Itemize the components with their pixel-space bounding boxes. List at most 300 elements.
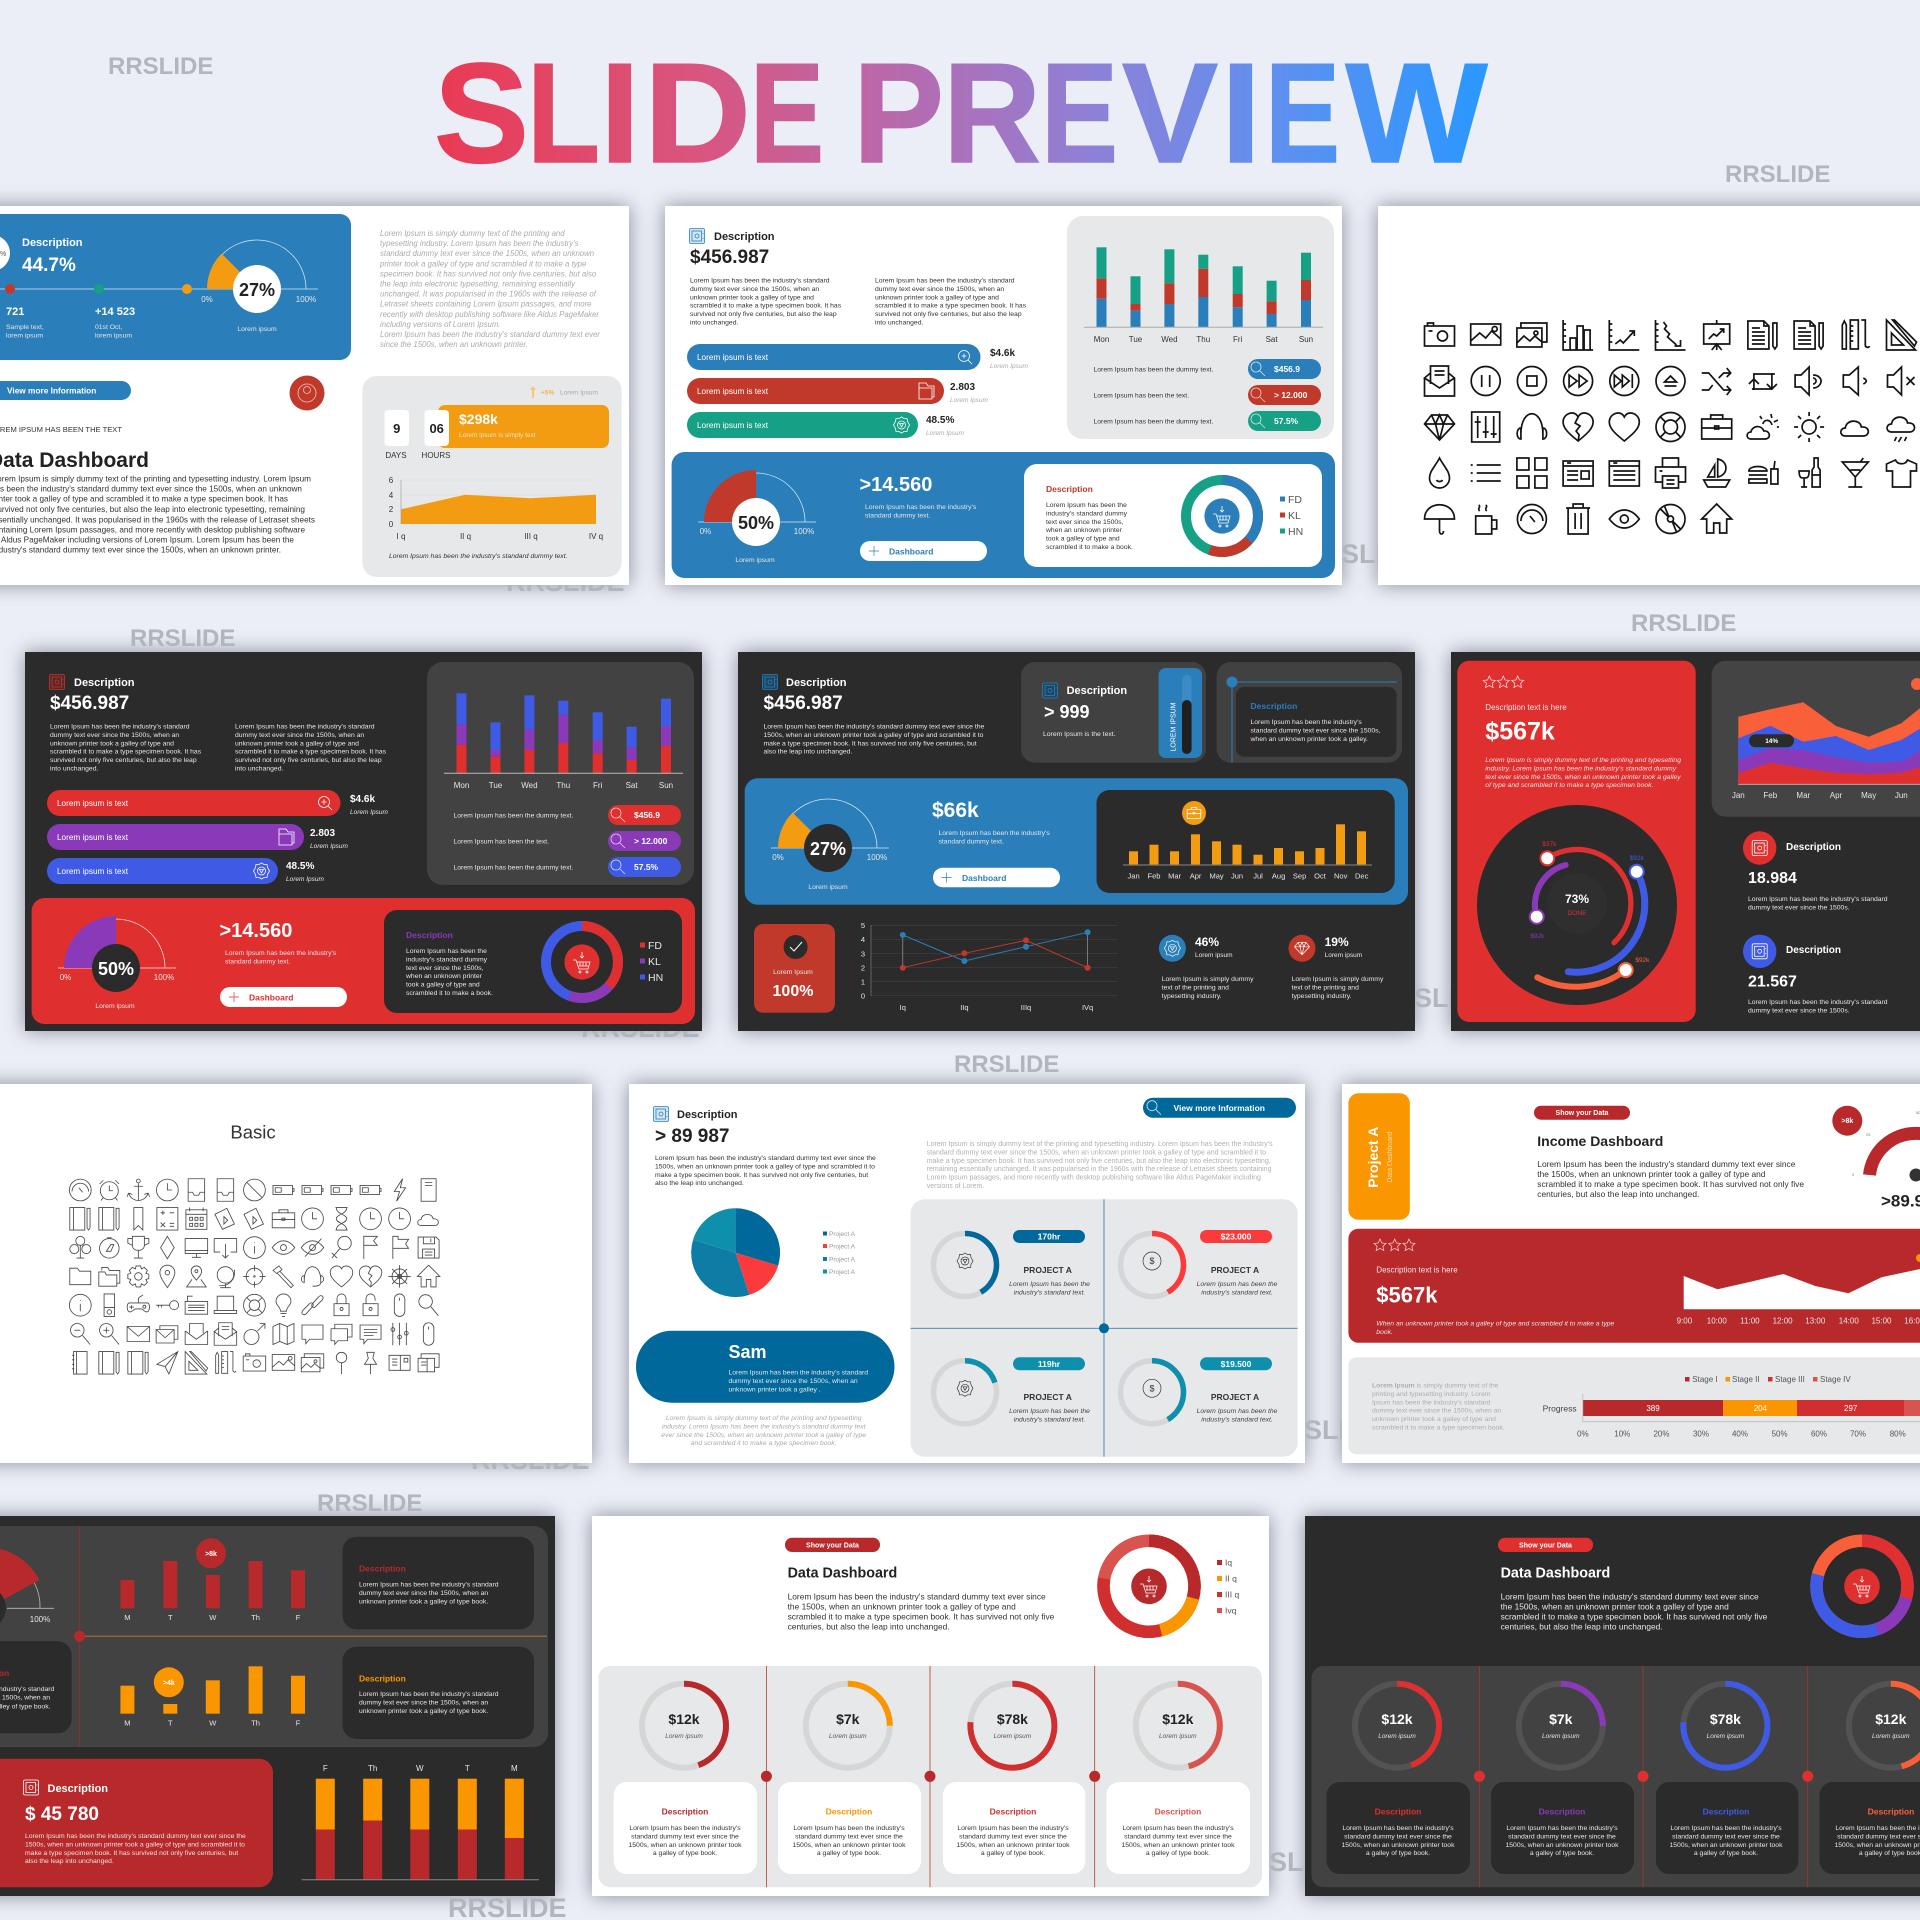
panel: blue gauge: [0, 214, 351, 360]
icon: cards heart: [244, 1208, 263, 1229]
progress bar blue: [687, 344, 1029, 370]
icon: user in red circle: [290, 376, 324, 410]
panel: blue footer: [672, 452, 1335, 578]
paragraph: 1500s, when an unknown printer took a galley of type and scrambled it to: [764, 732, 984, 739]
text column 2: into unchanged.: [235, 766, 283, 772]
dark monthly bar chart: Mar: [1168, 872, 1182, 880]
icon: cart: [1131, 1568, 1167, 1604]
progress bar green: [687, 412, 965, 438]
project tab: Project A: [1365, 1127, 1381, 1188]
panel: red radial: [1457, 661, 1696, 1022]
metric $7k: Lorem Ipsum has been the industry's: [1506, 1825, 1618, 1832]
days counter: DAYS: [385, 451, 407, 460]
progress bar purple: Lorem ipsum is text: [57, 833, 129, 842]
pie legend: [823, 1231, 856, 1276]
icon: house: [417, 1265, 440, 1287]
icon: diamond suit: [161, 1236, 174, 1259]
italic grey paragraph: Lorem Ipsum has been the industry's standard dummy text ever: [380, 330, 600, 339]
icon: house: [1702, 504, 1732, 533]
card: cropped description: [0, 1641, 72, 1733]
icon: bar chart: [1563, 320, 1593, 350]
pie legend: Project A: [829, 1269, 856, 1276]
stat 46%: 46%: [1195, 935, 1219, 949]
paragraph: Lorem Ipsum has been the industry's standard dummy text ever since the: [655, 1155, 876, 1162]
red weekly bars: T: [168, 1613, 173, 1622]
legend: FD: [648, 940, 662, 952]
text column 2: unknown printer took a galley of type and: [875, 294, 999, 301]
line chart: 3: [861, 950, 865, 958]
paragraph: the 1500s, when an unknown printer took a galley of type and: [1537, 1169, 1766, 1179]
red weekly bars: Th: [251, 1613, 260, 1622]
title: E: [1041, 34, 1118, 193]
icon: briefcase: [272, 1210, 295, 1228]
stacked bar chart: Sat: [626, 781, 638, 790]
gauge 27%: 0%: [201, 295, 213, 304]
completion card: 100%: [773, 983, 813, 1000]
legend: [1217, 1558, 1239, 1616]
gauge 27%: [201, 240, 316, 333]
gauge 50%: 100%: [794, 527, 814, 536]
line chart: IIIq: [1021, 1003, 1031, 1012]
caption: Description text is here: [1376, 1266, 1458, 1275]
gauge cropped: [0, 1549, 54, 1630]
icon: speaker: [1843, 367, 1866, 395]
slide 10: dark weekly dashboard, cropped left: [0, 1516, 555, 1896]
red weekly bars: M: [124, 1613, 131, 1622]
metric $12k: [1327, 1684, 1470, 1874]
paragraph: centuries, but also the leap into unchanged.: [1537, 1189, 1699, 1199]
row: blue pill: $456.9: [1274, 364, 1300, 374]
italic grey paragraph: the leap into electronic typesetting, remaining essentially: [380, 280, 576, 288]
icon: postcard: [389, 1355, 410, 1370]
icon: presentation: [1704, 320, 1730, 350]
stacked bar chart: Tue: [489, 781, 503, 790]
metric $78k: Lorem Ipsum has been the industry's: [957, 1825, 1069, 1832]
grey paragraph: remaining essentially unchanged. It was popularised in the 1960s with the release of Letraset sheets containing: [927, 1166, 1272, 1173]
gauge 27%: 0%: [772, 853, 784, 862]
watermark row three: RRSLIDE: [954, 1051, 1059, 1078]
semicircle gauge: 25: [1866, 1132, 1871, 1137]
icon: clock back: [156, 1179, 178, 1201]
panel: stacked area chart: Mar: [1796, 791, 1811, 800]
project $23.000: PROJECT A: [1211, 1265, 1259, 1275]
icon: loud speaker: [1795, 367, 1821, 395]
metric $12k: a galley of type book.: [1366, 1850, 1430, 1857]
stat 46%: [1159, 935, 1254, 1000]
stat 21.567: 21.567: [1748, 974, 1797, 991]
icon: eye off: [301, 1239, 324, 1257]
progress stacked bar: 40%: [1732, 1429, 1748, 1438]
row: red pill: > 12.000: [1274, 390, 1308, 400]
value: $567k: [1376, 1282, 1438, 1307]
metric $7k: a galley of type book.: [817, 1850, 881, 1857]
value: > 89 987: [655, 1126, 730, 1147]
chart note: Lorem Ipsum has been the industry's standard dummy text.: [389, 553, 568, 560]
stat 18.984: 18.984: [1748, 870, 1797, 887]
panel: red value: Lorem Ipsum has been the industry's standard dummy text ever since the: [25, 1833, 246, 1840]
icon: gauge: [1517, 504, 1546, 534]
white area chart: 13:00: [1805, 1317, 1826, 1326]
row: green pill: 57.5%: [1274, 416, 1299, 426]
progress stacked bar: [1543, 1394, 1920, 1438]
orange weekly bars: W: [209, 1719, 217, 1728]
gauge cropped: 100%: [30, 1615, 50, 1624]
stage legend: Stage II: [1732, 1375, 1760, 1384]
italic paragraph: Lorem Ipsum is simply dummy text of the printing and typesetting: [1485, 757, 1681, 764]
panel: red value: 1500s, when an unknown printer took a galley of type and scrambled it to: [25, 1841, 245, 1848]
dark description card: industry's standard dummy: [406, 956, 488, 963]
donut chart: [1816, 1541, 1908, 1632]
completion card: Lorem Ipsum: [773, 969, 813, 976]
icon: bulb: [276, 1294, 291, 1316]
dark monthly bar chart: Dec: [1355, 872, 1369, 880]
metric $78k: Lorem ipsum: [1707, 1733, 1745, 1740]
radial progress chart: $37k: [1542, 841, 1557, 848]
dashboard button: [860, 541, 987, 561]
vertical gauge: [1159, 668, 1202, 758]
text column 2: survived not only five centuries, but also the leap: [875, 311, 1022, 318]
legend: FD: [1288, 494, 1302, 506]
badge >8k: [1832, 1106, 1862, 1136]
progress bar red: Lorem ipsum is text: [697, 387, 769, 396]
icon: ban: [244, 1179, 265, 1201]
panel: red band: [1348, 1229, 1920, 1343]
panel: grey weekly: [0, 1526, 548, 1747]
watermark between slides 11 and 12: RRSLIDE: [1230, 1847, 1349, 1877]
row: red pill: Lorem Ipsum has been the dummy text.: [454, 812, 573, 820]
panel: blue callout: when an unknown printer took a galley.: [1250, 736, 1368, 743]
text column 1: Lorem Ipsum has been the industry's standard: [50, 724, 190, 730]
stat 18.984: Description: [1786, 842, 1841, 853]
icon: grid: [1517, 458, 1547, 488]
icon: set square: [185, 1352, 208, 1374]
text column 1: scrambled it to make a type specimen book. It has: [690, 303, 842, 310]
icon: cloud: [1841, 421, 1868, 436]
sub text: Lorem Ipsum has been the industry's: [938, 830, 1050, 837]
title: D: [644, 34, 751, 193]
dark description card: Description: [406, 930, 453, 940]
icon: unlock: [363, 1294, 378, 1316]
icon grid: [1424, 320, 1916, 534]
stars: [1374, 1239, 1415, 1251]
icon: headset: [301, 1267, 324, 1286]
stat 14 523: +14 523: [95, 306, 135, 318]
watermark between slides 8 and 9: RRSLIDE: [1265, 1415, 1384, 1445]
stacked weekly chart: Th: [368, 1764, 377, 1773]
text column 1: Lorem Ipsum has been the industry's standard: [690, 278, 830, 284]
title: L: [527, 34, 600, 193]
icon: lifebuoy: [244, 1294, 265, 1316]
icon: mouse: [394, 1294, 405, 1316]
project $23.000: [1120, 1230, 1278, 1297]
icon: chats: [331, 1324, 352, 1344]
icon: t-shirt: [1886, 460, 1916, 487]
stat 14 523: lorem ipsum: [95, 332, 132, 339]
icon: compass: [100, 1238, 119, 1258]
stacked weekly chart: M: [511, 1764, 518, 1773]
card: orange description: [342, 1647, 534, 1739]
show your data pill: [1534, 1106, 1630, 1120]
project 119hr: industry's standard text.: [1014, 1417, 1085, 1424]
metric $7k: [778, 1684, 921, 1874]
project 119hr: Lorem Ipsum has been the: [1009, 1408, 1090, 1415]
icon: paper plane: [157, 1352, 178, 1374]
panel: stacked area chart: May: [1861, 791, 1876, 800]
stat 18.984: dummy text ever since the 1500s.: [1748, 904, 1850, 911]
icon: folders: [99, 1267, 120, 1286]
orange weekly bars: T: [168, 1719, 173, 1728]
metric $12k: [614, 1684, 757, 1874]
icon: info: [69, 1294, 91, 1316]
icon: clock: [360, 1208, 381, 1230]
grey paragraph: Ipsum has been the industry's standard: [1372, 1399, 1491, 1406]
dark monthly bar chart: Feb: [1148, 872, 1160, 880]
legend: Ivq: [1225, 1606, 1237, 1616]
stacked weekly chart: T: [465, 1764, 470, 1773]
white description card: Lorem Ipsum has been the: [1046, 502, 1127, 509]
icon: cloud: [418, 1214, 438, 1226]
icon: helm: [388, 1265, 411, 1288]
icon: list: [1471, 465, 1501, 481]
stat 19%: 19%: [1325, 935, 1349, 949]
italic grey note: industry. Lorem Ipsum has been the industry's standard dummy text: [662, 1423, 867, 1430]
icon: inbox: [188, 1179, 205, 1201]
row: purple pill: Lorem Ipsum has been the text.: [454, 838, 549, 846]
paragraph: centuries, but also the leap into unchanged.: [788, 1622, 950, 1632]
card: red description: Lorem Ipsum has been the industry's standard: [359, 1582, 499, 1588]
value $66k: $66k: [932, 799, 979, 822]
text column 1: scrambled it to make a type specimen book. It has: [50, 749, 202, 756]
gauge 27%: Lorem ipsum: [237, 326, 277, 333]
progress stacked bar: Progress: [1543, 1404, 1577, 1414]
stat 21.567: [1743, 935, 1888, 1014]
icon: envelope: [127, 1326, 150, 1342]
project 119hr: 119hr: [1038, 1359, 1061, 1369]
stat 721: [6, 306, 44, 339]
icon: camera: [1424, 323, 1454, 346]
stacked bar chart: Thu: [1196, 335, 1210, 344]
project $23.000: $: [1149, 1256, 1155, 1266]
orange value banner: $298k: [459, 411, 498, 427]
italic grey paragraph: including versions of Lorem Ipsum.: [380, 320, 500, 329]
icon: gauge: [69, 1179, 91, 1201]
progress stacked bar: 50%: [1772, 1429, 1788, 1438]
show your data pill: [785, 1538, 880, 1552]
orange weekly bars: Th: [251, 1719, 260, 1728]
value: $456.987: [50, 693, 129, 714]
metric $12k second: $12k: [1162, 1711, 1194, 1727]
view more pill: View more Information: [7, 386, 96, 396]
italic paragraph: of type and scrambled it to make a type specimen book.: [1485, 782, 1654, 789]
project $19.500: $: [1149, 1383, 1155, 1393]
dark monthly bar chart: Jun: [1231, 872, 1243, 880]
icon: heart: [1609, 413, 1639, 441]
icon: fast forward: [1564, 366, 1593, 396]
panel: > 999: [1021, 662, 1206, 763]
watermark behind slide 4: RRSLIDE: [581, 1013, 700, 1043]
metric $78k: Lorem ipsum: [994, 1733, 1032, 1740]
panel: > 999: > 999: [1044, 702, 1090, 722]
row: blue pill: [454, 857, 681, 877]
paragraph: also the leap into unchanged.: [655, 1180, 744, 1187]
value: $456.987: [764, 693, 843, 714]
progress bar purple: [47, 824, 349, 850]
orange value banner: Lorem ipsum is simply text: [459, 432, 536, 439]
line chart: 1: [861, 978, 865, 986]
italic grey paragraph: standard dummy text ever since the 1500s, when an unknown: [380, 249, 594, 258]
icon: disc: [1656, 504, 1685, 534]
icon: umbrella: [1424, 505, 1454, 534]
metric $12k second: Lorem Ipsum has been the industry's: [1122, 1825, 1234, 1832]
panel: blue callout: Lorem Ipsum has been the industry's: [1250, 719, 1362, 726]
icon: next: [1610, 366, 1639, 396]
italic grey note: ever since the 1500s, when an unknown printer took a galley of type: [661, 1432, 866, 1439]
icon: broken heart: [359, 1266, 382, 1287]
gauge 50%: 50%: [738, 513, 774, 533]
gauge 27%: 27%: [239, 280, 275, 300]
icon: sun: [1794, 412, 1824, 442]
gauge 50%: 50%: [98, 959, 134, 979]
panel: stacked area chart: Jun: [1895, 791, 1908, 800]
progress stacked bar: 80%: [1890, 1429, 1906, 1438]
area chart: 6: [389, 476, 394, 485]
text column 1: unknown printer took a galley of type and: [690, 294, 814, 301]
icon: hourglass: [336, 1208, 348, 1230]
icon: headphones: [1517, 414, 1547, 439]
icon: eye: [1609, 510, 1639, 528]
pie chart: [691, 1208, 780, 1297]
metric $12k second: 1500s, when an unknown printer took: [1122, 1842, 1235, 1849]
text column 1: dummy text ever since the 1500s, when an: [50, 732, 179, 739]
progress bar green: 48.5%: [926, 415, 954, 426]
white description card: text ever since the 1500s,: [1046, 519, 1124, 526]
icon: stopwatch: [302, 1208, 323, 1230]
icon: set square: [1886, 320, 1916, 350]
dashboard button: [933, 868, 1060, 887]
icon: lock: [334, 1294, 349, 1316]
metric $12k: standard dummy text ever since the: [1344, 1833, 1452, 1840]
icon: hot mug: [1476, 505, 1497, 534]
metric $12k: Description: [662, 1806, 708, 1816]
white area chart: 9:00: [1677, 1317, 1693, 1326]
dark description card: text ever since the 1500s,: [406, 965, 484, 972]
stacked bar chart: Mon: [454, 781, 469, 790]
panel: blue callout: Description: [1250, 701, 1297, 711]
icon: open envelope: [185, 1324, 208, 1344]
icon: lifebuoy: [1656, 412, 1685, 442]
hours counter: [422, 410, 450, 460]
icon: growth chart: [1609, 320, 1639, 350]
dark description card: scrambled it to make a book.: [406, 990, 493, 997]
progress stacked bar: 30%: [1693, 1429, 1709, 1438]
project 170hr: PROJECT A: [1024, 1265, 1072, 1275]
icon: map pin: [187, 1266, 206, 1287]
value: $456.987: [690, 247, 769, 268]
card: orange description: dummy text ever since the 1500s, when an: [359, 1699, 488, 1706]
line chart: 0: [861, 992, 865, 1000]
metric $7k: 1500s, when an unknown printer took: [1506, 1842, 1619, 1849]
italic grey note: and scrambled it to make a type specimen book.: [691, 1440, 837, 1447]
dark monthly bar chart: Oct: [1314, 872, 1327, 880]
progress stacked bar: 389: [1646, 1404, 1660, 1413]
slide 6: dark radial dashboard, cropped right: [1451, 652, 1920, 1031]
icon: cart: [1204, 498, 1240, 534]
area chart: II q: [460, 532, 471, 541]
card: red description: unknown printer took a galley of type book.: [359, 1598, 488, 1605]
description heading: Description: [677, 1109, 738, 1121]
paragraph: Lorem Ipsum has been the industry's standard dummy text ever since: [1501, 1592, 1759, 1602]
metric $7k: Lorem ipsum: [829, 1733, 867, 1740]
italic grey paragraph: unchanged. It was popularised in the 1960s with the release of: [380, 290, 597, 299]
text column 2: into unchanged.: [875, 320, 923, 326]
icon: search: [419, 1295, 438, 1316]
icon: chat text: [360, 1325, 381, 1344]
icon: water drop: [1430, 458, 1450, 488]
icon: burger and drink: [1749, 461, 1778, 484]
icon: picture: [1471, 324, 1501, 345]
stat 19%: [1288, 935, 1384, 1000]
white description card: industry's standard dummy: [1046, 510, 1128, 517]
icon: hammer: [273, 1266, 293, 1288]
icon: envelopes: [156, 1326, 178, 1343]
stacked bar chart: Fri: [593, 781, 603, 790]
project 170hr: Lorem Ipsum has been the: [1009, 1281, 1090, 1288]
dark monthly bar chart: May: [1210, 872, 1224, 880]
line chart: IVq: [1082, 1003, 1093, 1012]
sam pill: unknown printer took a galley .: [728, 1386, 821, 1393]
white area chart: 10:00: [1707, 1317, 1727, 1326]
white area chart: 15:00: [1871, 1317, 1892, 1326]
panel: stacked area chart: Apr: [1830, 791, 1843, 800]
stage legend: Stage IV: [1820, 1375, 1851, 1384]
watermark top right: RRSLIDE: [1725, 161, 1830, 188]
icon: anchor: [127, 1179, 150, 1200]
dark description card: Lorem Ipsum has been the: [406, 948, 487, 955]
icon: battery charge: [273, 1186, 294, 1194]
progress bar red: Lorem Ipsum: [950, 397, 989, 404]
panel: stacked area chart: 14%: [1765, 738, 1778, 745]
show your data pill: Show your Data: [806, 1542, 859, 1549]
panel: metrics: [1312, 1666, 1920, 1887]
metric $7k: standard dummy text ever since the: [795, 1833, 903, 1840]
icon: mixer: [1472, 412, 1500, 442]
note +5%: [530, 386, 598, 398]
white description card: when an unknown printer: [1045, 527, 1123, 534]
metric $78k: Description: [1703, 1806, 1749, 1816]
area chart: 4: [389, 491, 394, 500]
sub text: standard dummy text.: [865, 512, 930, 519]
row: blue pill: 57.5%: [634, 862, 659, 872]
progress stacked bar: 204: [1754, 1404, 1768, 1413]
grey paragraph: dummy text ever since the 1500s, when an: [1372, 1408, 1501, 1415]
icon: shuffle: [1702, 368, 1731, 395]
stat 18.984: [1743, 831, 1888, 911]
stat 19%: typesetting industry.: [1292, 993, 1352, 1000]
value >14.560: >14.560: [860, 474, 932, 496]
metric $12k second: Lorem ipsum: [1159, 1733, 1197, 1740]
panel: > 999: Lorem Ipsum is the text.: [1043, 731, 1116, 738]
sam pill: Lorem Ipsum has been the industry's standard: [728, 1370, 868, 1376]
icon: clock back: [389, 1208, 410, 1230]
metric $12k: $12k: [668, 1711, 700, 1727]
body paragraph: [0, 474, 315, 554]
icon: male: [244, 1324, 265, 1344]
body paragraph: survived not only five centuries, but also the leap into electronic typesetting, remaining: [0, 505, 305, 514]
white percent badge: %: [0, 251, 6, 258]
progress bar blue: Lorem Ipsum: [286, 876, 325, 883]
stacked bar chart: Thu: [556, 781, 570, 790]
watermark row two left: RRSLIDE: [130, 625, 235, 652]
